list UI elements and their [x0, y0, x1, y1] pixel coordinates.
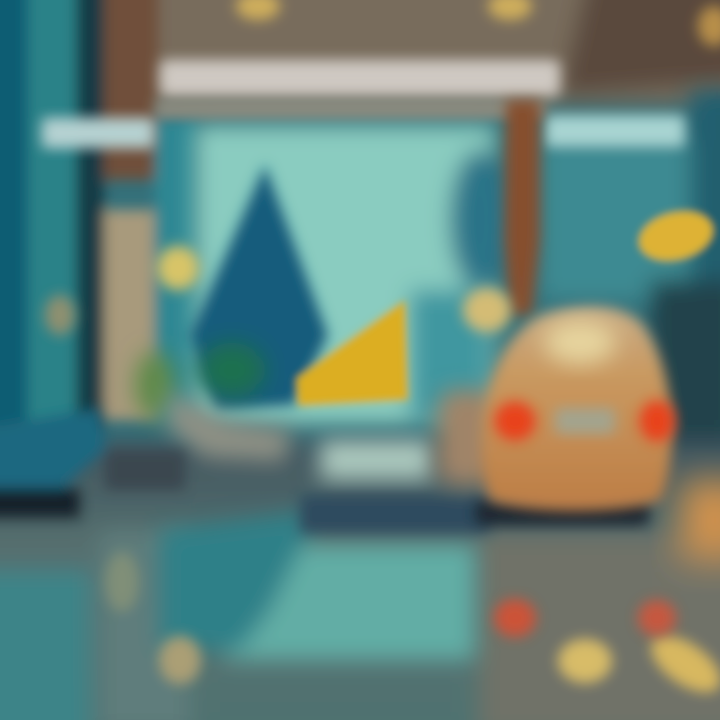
yellow wedge: [296, 300, 408, 406]
ceiling: [0, 0, 720, 105]
yellow sign right: [633, 204, 719, 268]
car side: [438, 390, 498, 485]
floor light reflections: [105, 552, 720, 703]
mid band: [155, 100, 545, 118]
car windscreen glow: [544, 320, 616, 364]
green plant: [135, 342, 266, 419]
license plate: [555, 408, 615, 434]
hanging lights: [45, 246, 511, 335]
grey rock: [165, 390, 292, 462]
right banner: [545, 115, 685, 147]
orange floor patch: [680, 480, 720, 560]
dark blue triangle: [190, 165, 328, 410]
left wall columns: [0, 0, 197, 430]
floor: [0, 440, 720, 720]
red floor reflections: [494, 599, 676, 637]
central light teal panel: [195, 125, 510, 425]
right wall: [540, 90, 720, 470]
left banner: [42, 118, 154, 148]
top banner: [160, 60, 560, 96]
left dark vehicle: [0, 408, 185, 518]
brown column: [504, 100, 540, 315]
ceiling lights: [236, 0, 720, 46]
floor reflection of panel: [160, 510, 475, 660]
left tail light: [494, 401, 536, 441]
light floor patch: [320, 440, 432, 480]
right tail light: [639, 400, 675, 442]
dark floor stripe: [300, 495, 490, 533]
orange car: [438, 307, 675, 526]
car shadow: [475, 500, 650, 526]
car body: [481, 307, 672, 510]
